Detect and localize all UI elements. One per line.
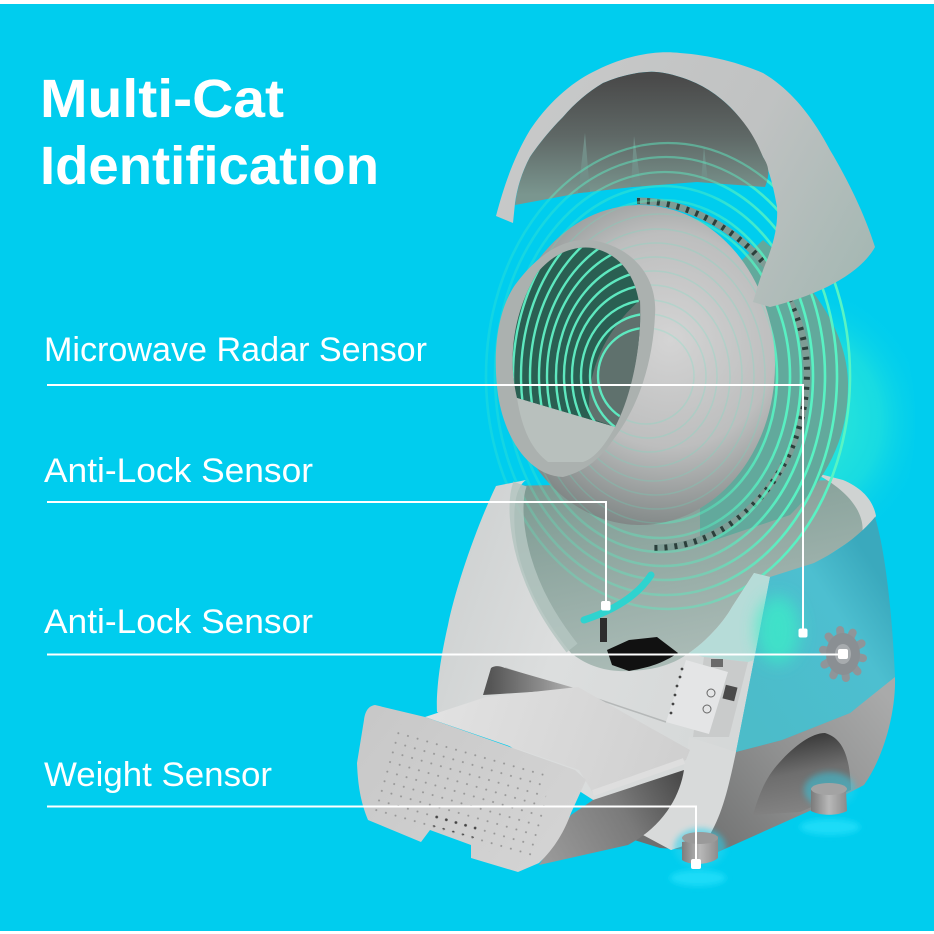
drum ball (505, 205, 775, 525)
rear dome of litter drum (700, 240, 848, 545)
callout: Anti-Lock Sensor (lower) (44, 603, 848, 659)
title (40, 69, 379, 196)
title: Multi-Cat (40, 69, 284, 129)
sensor glow inside band (756, 596, 800, 664)
arch rim translucent band (517, 484, 572, 648)
control card (666, 660, 728, 734)
radar rings through lid (548, 142, 768, 199)
callout: Anti-Lock Sensor (lower): Anti-Lock Sensor (44, 603, 313, 641)
drum entrance lower wedge (517, 398, 615, 462)
drawer slot (483, 666, 578, 695)
rear interior of base (500, 480, 876, 680)
callout: Weight Sensor: Weight Sensor (44, 756, 272, 794)
gear knob (823, 630, 863, 678)
radar rings: outer waves (486, 143, 850, 609)
interior mechanism: dark box (607, 637, 678, 671)
drawer tray (425, 687, 690, 793)
title: Identification (40, 136, 379, 196)
scoop plate (357, 705, 586, 872)
toothed drum ring (637, 201, 807, 548)
callout: Weight Sensor (44, 756, 701, 869)
front lower panel of base (643, 737, 736, 850)
drawer rail (593, 761, 684, 793)
anti-lock teal strip (584, 575, 651, 620)
rear foot (800, 772, 860, 835)
translucent right panel of base (689, 573, 770, 662)
radar rings over drum (543, 206, 774, 524)
base front body with arch (437, 480, 770, 850)
callout: Anti-Lock Sensor (upper) (44, 452, 610, 610)
rear base rim (812, 472, 876, 535)
control bay (693, 657, 748, 737)
lower grey body (621, 677, 895, 852)
lid outer shell (496, 52, 875, 307)
callout: Anti-Lock Sensor (upper): Anti-Lock Sensor (44, 452, 313, 490)
callout: Microwave Radar Sensor: Microwave Radar Sensor (44, 331, 427, 369)
callout: Microwave Radar Sensor (44, 331, 808, 638)
drum entrance opening with rings (512, 248, 640, 427)
drum entrance rim (496, 240, 655, 477)
lid interior (515, 72, 768, 205)
front foot (670, 828, 726, 886)
drawer slot frame (505, 668, 666, 722)
teal band (736, 517, 895, 752)
drawer underside (539, 770, 684, 865)
lid interior ribs (578, 133, 708, 193)
radar glow behind product (665, 230, 915, 610)
interior mechanism: dark post (600, 618, 607, 642)
